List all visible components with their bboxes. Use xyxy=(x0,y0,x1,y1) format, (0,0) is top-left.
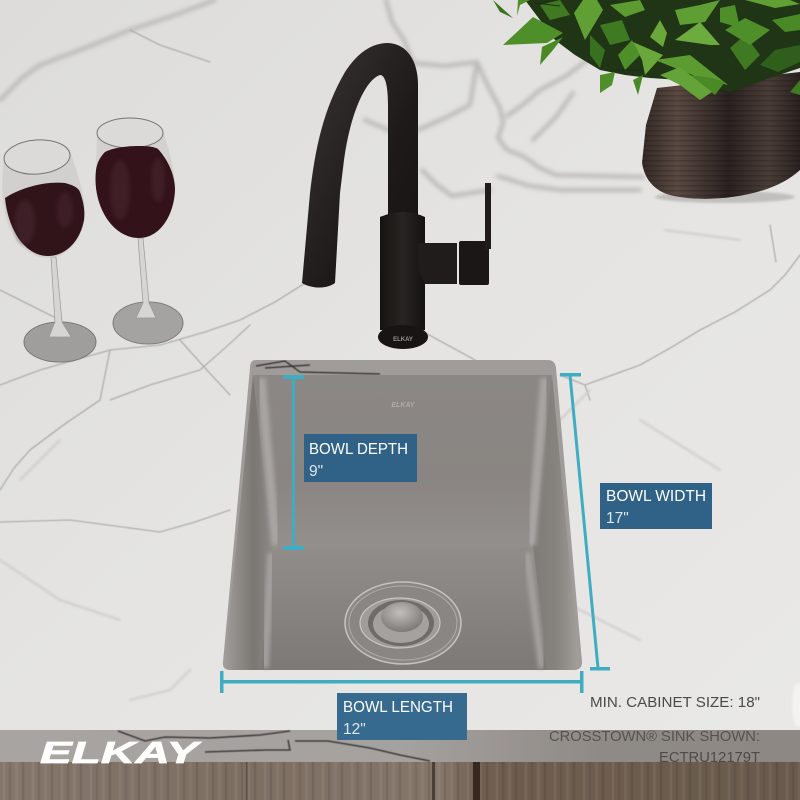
label: bowl width: BOWL WIDTH xyxy=(606,488,706,505)
label: bowl depth xyxy=(304,434,417,482)
dimension: bowl length xyxy=(220,671,584,693)
faucet lever xyxy=(485,183,491,249)
sink corner highlights xyxy=(261,378,545,668)
sink maker mark: ELKAY xyxy=(391,402,416,409)
sink left wall xyxy=(225,375,273,670)
sink rim xyxy=(223,360,582,670)
plant foliage xyxy=(493,0,800,100)
note: sink shown xyxy=(549,728,760,766)
label: bowl depth: 9" xyxy=(309,463,323,480)
faucet xyxy=(302,43,491,349)
label: bowl width: 17" xyxy=(606,510,629,527)
label: bowl length: 12" xyxy=(343,721,366,738)
wood cabinet xyxy=(0,755,800,800)
note: sink shown: ECTRU12179T xyxy=(659,749,760,766)
note: sink shown: CROSSTOWN® SINK SHOWN: xyxy=(549,728,760,745)
note: minimum cabinet size: MIN. CABINET SIZE: 18" xyxy=(590,694,760,711)
label: bowl length: BOWL LENGTH xyxy=(343,699,453,716)
faucet gooseneck xyxy=(302,43,418,288)
label: bowl depth: BOWL DEPTH xyxy=(309,441,408,458)
sink floor xyxy=(260,547,547,670)
wine glass: right xyxy=(95,118,183,344)
faucet base xyxy=(378,325,428,349)
faucet body xyxy=(380,212,425,330)
white patch at right edge xyxy=(792,683,800,727)
faucet maker mark: ELKAY xyxy=(393,337,413,343)
counter edge xyxy=(0,730,800,762)
sink right wall xyxy=(533,375,579,670)
logo: Elkay: ELKAY xyxy=(40,735,203,770)
dimension: bowl depth xyxy=(283,375,304,550)
plant pot xyxy=(642,72,800,203)
sink back wall xyxy=(253,375,552,547)
faucet handle xyxy=(418,243,457,284)
sink xyxy=(223,360,582,670)
drain xyxy=(345,582,461,664)
wine glass: left xyxy=(2,138,96,362)
label: bowl length xyxy=(337,693,467,740)
label: bowl width xyxy=(600,483,712,529)
rim marble veins xyxy=(256,361,380,374)
dimension: bowl width xyxy=(560,373,610,670)
